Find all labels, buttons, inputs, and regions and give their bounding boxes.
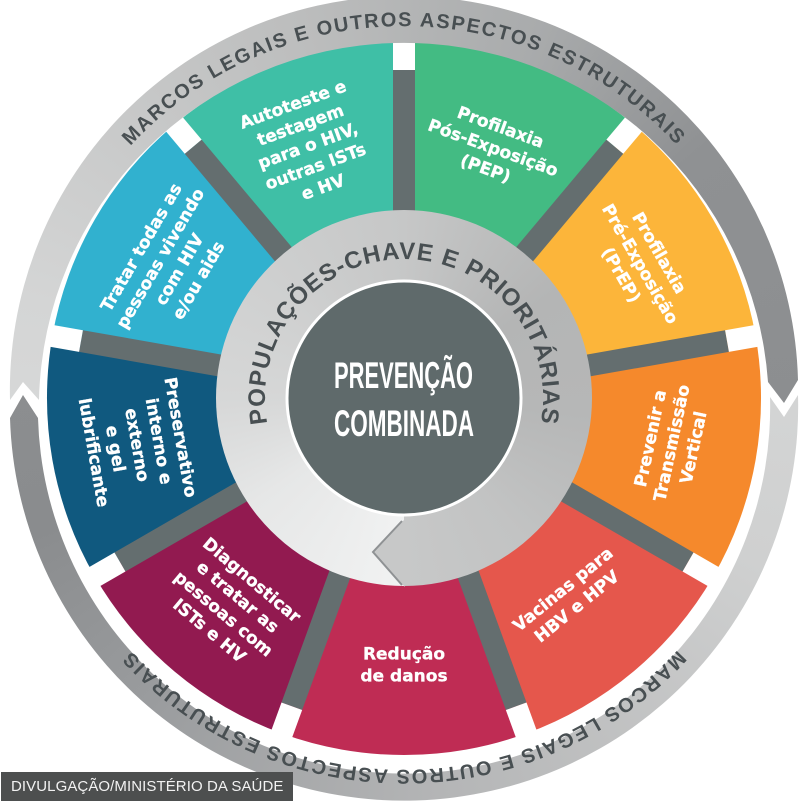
segment: Autoteste e testagem [174,41,404,398]
separator bars [44,34,764,744]
label: Vacinas: HBV e HPV [531,566,624,647]
label: PrEP: (PrEP) [597,244,644,306]
segment: Preservativo [47,336,404,576]
label: Autoteste: outras ISTs [263,140,369,195]
label: PEP: Profilaxia [454,103,546,153]
label: Transmissão Vertical: Transmissão [650,383,695,503]
label: Tratar [94,174,247,354]
center title [334,354,474,444]
inner ring arrowhead [373,519,405,587]
outer ring arrow: top arc [10,0,798,403]
label: Transmissão Vertical: Prevenir a [631,388,671,489]
label: Tratar: pessoas vivendo [113,185,209,332]
label: Autoteste: e HV [299,170,348,205]
label: Redução de danos: de danos [360,666,448,686]
label: Autoteste: Autoteste e [237,77,349,134]
label: Tratar: Tratar todas as [97,180,187,315]
label: PEP: (PEP) [457,151,513,187]
label: Tratar: e/ou aids [169,238,229,323]
inner ring text: POPULAÇÕES-CHAVE E PRIORITÁRIAS [248,242,560,424]
label: PEP [418,95,568,202]
label: Diagnosticar: pessoas com [170,567,276,661]
label: PrEP [578,190,701,339]
label: Preservativo: e gel [101,424,129,474]
segment: Vacinas [404,398,713,734]
label: Transmissão Vertical [629,378,716,508]
label: Diagnosticar [156,534,305,678]
label: Redução de danos: Redução [363,644,445,664]
label: Transmissão Vertical: Vertical [677,410,711,486]
photo credit: DIVULGAÇÃO/MINISTÉRIO DA SAÚDE [11,778,283,795]
label: Preservativo: Preservativo [159,376,200,499]
inner ring: populations band [216,210,592,586]
center title: PREVENÇÃO [334,354,473,396]
segment: Transmissão Vertical [404,336,761,576]
label: Preservativo: interno e [141,397,176,486]
segment: Diagnosticar [95,398,404,734]
segment: PrEP [404,124,756,398]
label: Autoteste: testagem [255,101,347,151]
photo credit [1,772,293,801]
label: Redução de danos [360,644,448,686]
label: Tratar: com HIV [152,230,209,309]
label: PrEP: Profilaxia [627,209,690,298]
outer ring text: top: MARCOS LEGAIS E OUTROS ASPECTOS ESTRUTURAIS [121,12,684,145]
center title: COMBINADA [334,403,474,444]
outer ring text: bottom: MARCOS LEGAIS E OUTROS ASPECTOS ESTRUTURAIS [124,651,687,784]
label: PrEP: Pré-Exposição [597,201,682,328]
segment: Tratar [52,124,404,398]
label: Autoteste [237,77,379,216]
center disc [287,281,521,515]
label: Diagnosticar: ISTs e HV [169,595,250,668]
label: PEP: Pós-Exposição [425,116,561,181]
label: Preservativo: externo [120,407,153,483]
segment: Redução de danos [282,398,526,755]
label: Diagnosticar: Diagnosticar [198,534,305,628]
segment: PEP [404,41,634,398]
label: Autoteste: para o HIV, [255,119,361,174]
label: Vacinas: Vacinas para [509,543,617,636]
label: Preservativo: lubrificante [74,397,113,509]
label: Preservativo [73,376,200,514]
label: Diagnosticar: e tratar as [192,557,282,638]
outer ring arrow: bottom arc [10,395,798,801]
